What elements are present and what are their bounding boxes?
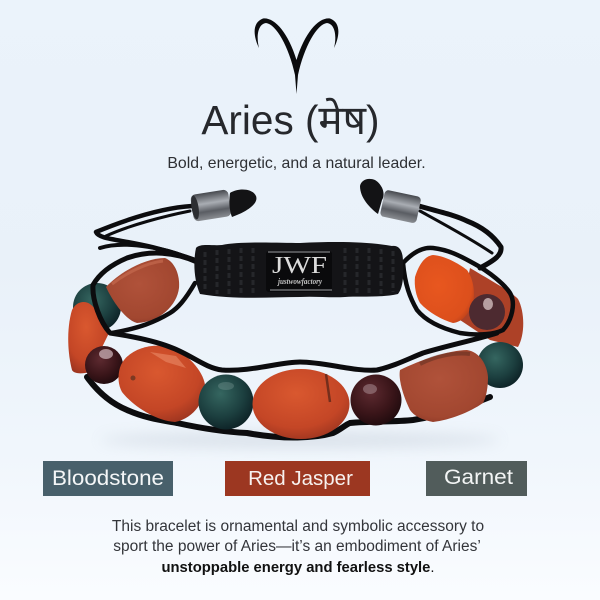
lower cord [87,377,490,438]
shadow [100,432,500,448]
bracelet [68,179,523,448]
cord knot: right [360,179,384,214]
cords [93,206,513,370]
stone: left edge jasper [68,302,108,373]
band weave texture [205,248,393,296]
label: Garnet: Garnet [444,466,513,489]
stone: center jasper [252,369,350,439]
back stone: left bloodstone [73,283,121,331]
label: Garnet [426,461,527,496]
label plate: JWF [266,251,332,292]
icon: Aries symbol [255,18,338,94]
description text: unstoppable energy and fearless style. [161,560,435,576]
stone: right lower jasper [400,350,488,422]
label: Red Jasper: Red Jasper [248,467,353,490]
label: Red Jasper [225,461,370,496]
hematite bead: left [190,189,232,222]
description text: sport the power of Aries—it’s an embodiment of Aries’ [113,538,481,555]
label: Bloodstone: Bloodstone [52,467,164,490]
stone: lower garnet [350,374,402,426]
stone: left garnet [85,346,123,384]
hematite bead: right [380,190,421,224]
stone: right bloodstone [477,342,523,388]
description text [112,518,484,576]
tagline: Bold, energetic, and a natural leader. [167,155,426,172]
woven cord band [194,242,403,298]
stone: far right jasper [460,268,523,347]
cord knot: left [229,190,256,217]
stone: right top jasper [415,255,474,323]
stone: lower bloodstone [198,374,254,430]
label: Bloodstone [43,461,173,496]
stone: left lower jasper [118,346,205,422]
stone: right garnet [469,294,505,330]
description text: This bracelet is ornamental and symbolic accessory to [112,518,484,535]
title: Aries (मेष) [201,97,380,143]
stone: left top jasper [106,258,179,323]
label plate: JWF: JWF [272,253,327,279]
label plate: JWF: justwowfactory [276,277,322,286]
